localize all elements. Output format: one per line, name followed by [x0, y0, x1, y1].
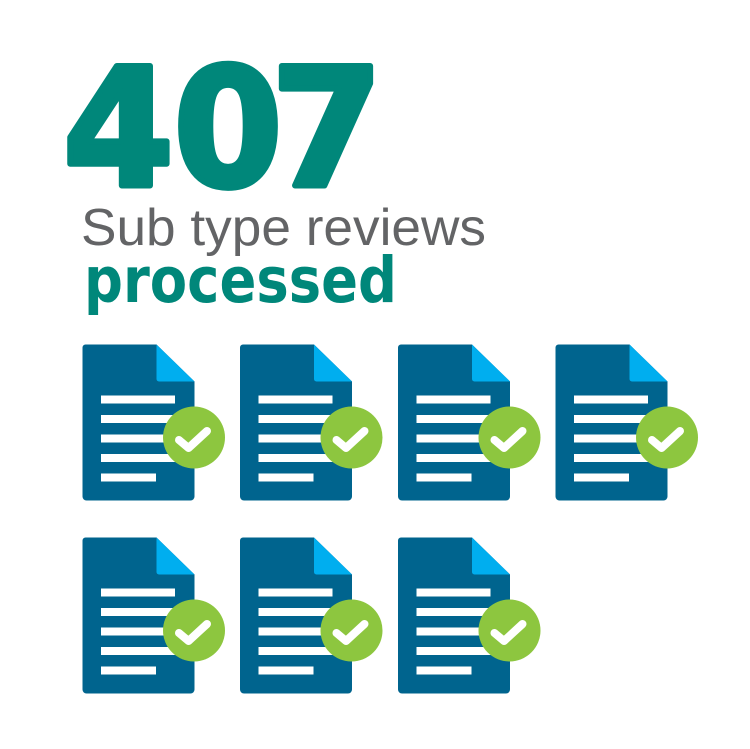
big number: 407: 7: [271, 34, 383, 224]
icon: document with check, row 2 column 3: [398, 538, 540, 694]
subtitle: Sub type reviews: Sub type reviews: [81, 199, 486, 257]
icon: document with check, row 2 column 2: [240, 538, 382, 694]
icon: document with check, row 1 column 2: [240, 344, 382, 500]
icon: document with check, row 1 column 3: [398, 344, 540, 500]
big number: 407: 0: [174, 34, 282, 224]
big number: 407: [63, 34, 383, 224]
icon: document with check, row 1 column 1: [82, 344, 225, 500]
icon: document with check, row 1 column 4: [556, 344, 698, 500]
subtitle emphasis: processed: processed: [84, 244, 397, 317]
big number: 407: 4: [63, 34, 174, 224]
icon: document with check, row 2 column 1: [82, 538, 225, 694]
